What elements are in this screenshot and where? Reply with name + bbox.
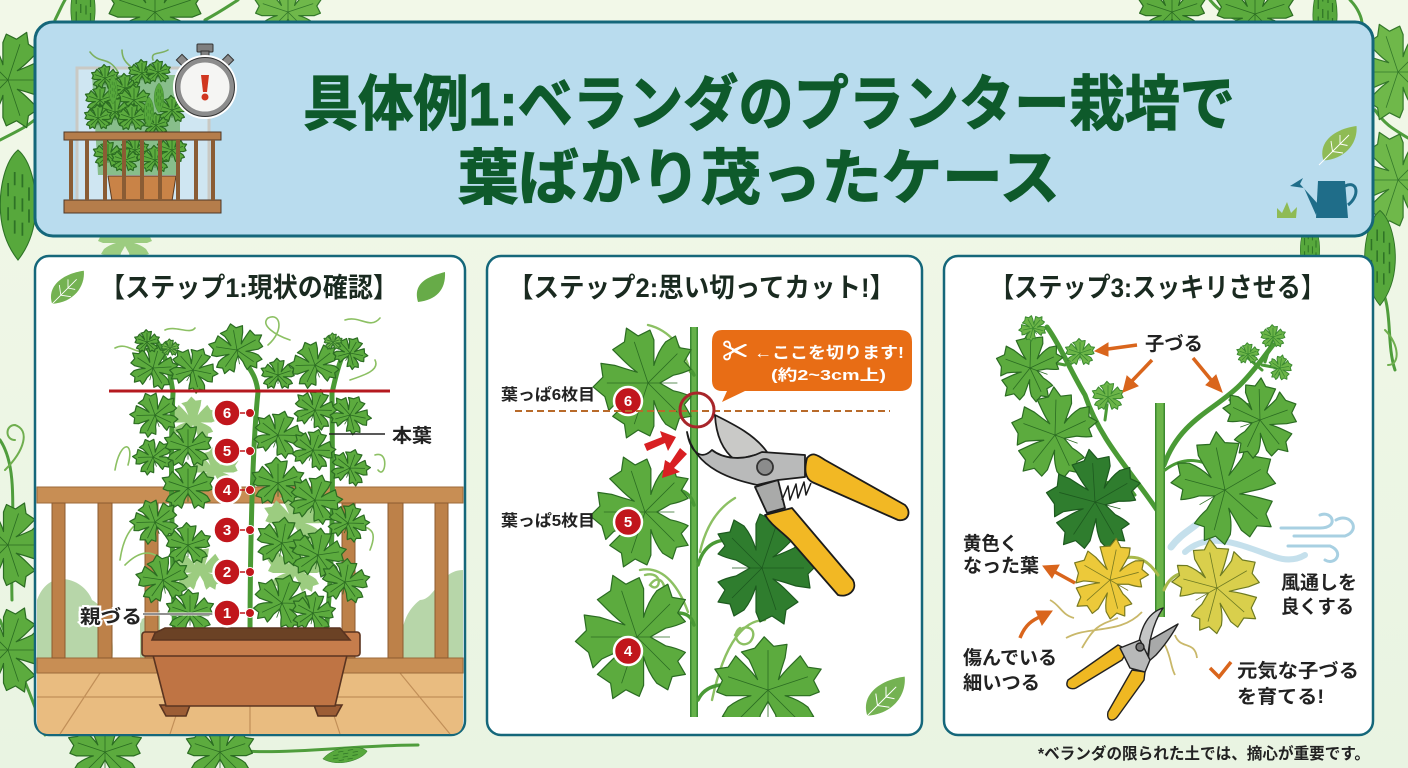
plant: stems and leaves bbox=[985, 310, 1310, 646]
numbered markers 1 to 6: 4 bbox=[223, 482, 232, 499]
callout: cut here: ✂ bbox=[722, 338, 748, 366]
labels: 細いつる bbox=[963, 672, 1040, 694]
label: 本葉: 本葉 bbox=[392, 425, 432, 447]
icon: pruning shears bbox=[1067, 608, 1178, 720]
labels bbox=[963, 333, 1359, 708]
labels: 元気な子づる bbox=[1237, 660, 1359, 682]
numbered leaf markers bbox=[614, 387, 642, 665]
footnote: *ベランダの限られた土では、摘心が重要です。 bbox=[1038, 744, 1370, 763]
scene: deck and railing bbox=[37, 487, 463, 734]
cut guide dashed line bbox=[515, 410, 890, 412]
plant: stem, tendrils and leaves bbox=[575, 325, 821, 732]
heading: step 1: 【ステップ1:現状の確認】 bbox=[100, 273, 398, 303]
labels: 風通しを bbox=[1281, 572, 1357, 594]
icon: wind bbox=[1171, 514, 1353, 561]
labels: leaf counts bbox=[501, 385, 595, 530]
title bbox=[303, 71, 1235, 212]
panel: step 3 bbox=[944, 256, 1373, 735]
red arrows bbox=[644, 431, 687, 478]
leader: 本葉 bbox=[329, 433, 385, 435]
panel: step 1 bbox=[35, 256, 465, 735]
leader: 親づる bbox=[143, 612, 215, 616]
labels: leaf counts: 葉っぱ6枚目 bbox=[501, 385, 595, 404]
cut line bbox=[109, 390, 390, 392]
labels: を育てる! bbox=[1237, 686, 1324, 708]
numbered markers 1 to 6 bbox=[143, 400, 254, 626]
labels: 黄色く bbox=[963, 533, 1018, 555]
icon: pruning shears bbox=[687, 415, 909, 596]
numbered markers 1 to 6: 2 bbox=[223, 564, 231, 581]
planter box bbox=[142, 628, 360, 716]
icon: leaf bbox=[1319, 126, 1357, 165]
labels: 良くする bbox=[1281, 596, 1354, 618]
icon: balcony planter bbox=[64, 50, 221, 213]
icon: watering can bbox=[1290, 178, 1356, 218]
labels: 傷んでいる bbox=[963, 647, 1057, 669]
title: 葉ばかり茂ったケース bbox=[458, 145, 1060, 212]
numbered leaf markers: 5 bbox=[624, 514, 632, 531]
numbered leaf markers: 4 bbox=[624, 643, 633, 660]
callout: cut here: (約2~3cm上) bbox=[771, 367, 886, 384]
plant: leaves bbox=[125, 319, 378, 634]
icon: grass bbox=[1277, 202, 1297, 218]
numbered markers 1 to 6: 1 bbox=[223, 605, 231, 622]
heading: step 3: 【ステップ3:スッキリさせる】 bbox=[990, 273, 1325, 303]
labels: leaf counts: 葉っぱ5枚目 bbox=[501, 511, 595, 530]
thin damaged vines bbox=[1050, 600, 1197, 675]
numbered markers 1 to 6: 5 bbox=[223, 443, 231, 460]
label: 親づる: 親づる bbox=[80, 606, 142, 628]
heading: step 2: 【ステップ2:思い切ってカット!】 bbox=[508, 273, 895, 303]
icon: leaf left bbox=[48, 271, 84, 308]
icon: stopwatch bbox=[173, 44, 237, 119]
labels: なった葉 bbox=[963, 555, 1039, 577]
labels: 子づる bbox=[1145, 333, 1203, 355]
orange arrows bbox=[1020, 343, 1222, 638]
callout: cut here bbox=[712, 330, 912, 402]
plant: tendrils and stems bbox=[115, 317, 385, 640]
icon: check mark bbox=[1210, 662, 1231, 677]
panel: step 2 bbox=[487, 256, 922, 735]
icon: leaf bottom right bbox=[862, 677, 905, 721]
callout: cut here: ←ここを切ります! bbox=[754, 344, 904, 362]
numbered leaf markers: 6 bbox=[624, 393, 632, 410]
numbered markers 1 to 6: 6 bbox=[223, 405, 231, 422]
header banner bbox=[35, 22, 1373, 236]
icon: leaf right bbox=[417, 272, 445, 302]
numbered markers 1 to 6: 3 bbox=[223, 522, 231, 539]
title: 具体例1:ベランダのプランター栽培で bbox=[303, 71, 1235, 138]
cut circle bbox=[680, 393, 714, 427]
